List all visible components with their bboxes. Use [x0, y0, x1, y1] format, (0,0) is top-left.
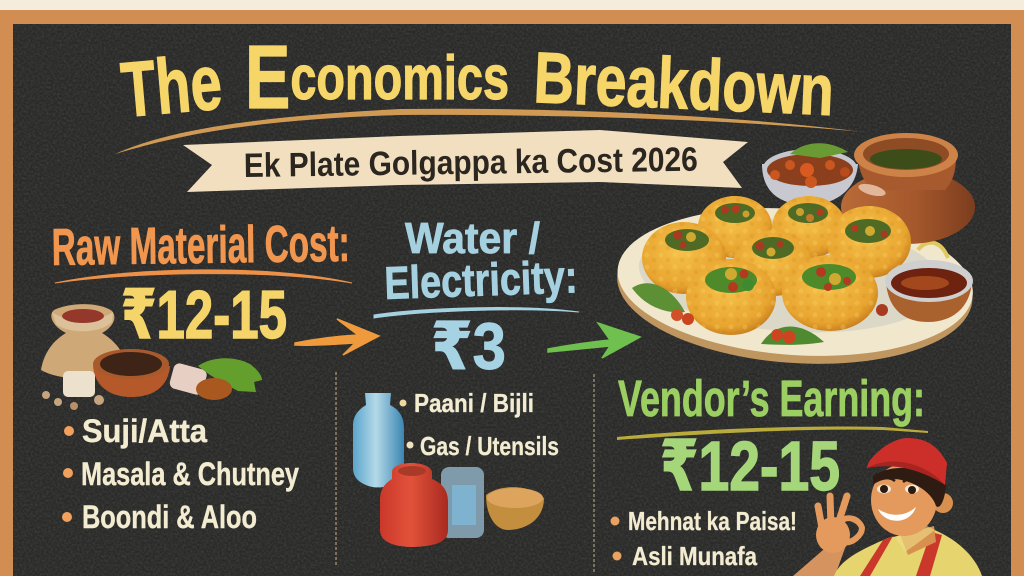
- list: vendor benefits: [610, 506, 797, 571]
- amount: ₹12-15: [660, 427, 840, 505]
- subtitle banner: Ek Plate Golgappa ka Cost 2026: [244, 141, 698, 185]
- title: The: [118, 38, 225, 134]
- underline: [617, 426, 928, 440]
- list: raw materials: Suji/Atta: [82, 413, 207, 449]
- arrow: orange: [295, 319, 379, 355]
- list: vendor benefits: Asli Munafa: [632, 541, 757, 571]
- icon: cylinders and bowl: [353, 393, 544, 547]
- title: conomics: [290, 44, 509, 113]
- clay pot: [841, 133, 975, 244]
- list: raw materials: Masala & Chutney: [81, 456, 299, 492]
- garnish leaves and tomatoes: [632, 283, 888, 345]
- plate handle: [918, 243, 948, 258]
- heading: raw material cost: Raw Material Cost:: [51, 215, 350, 277]
- heading: water / electricity: Water /: [405, 214, 540, 263]
- heading: water / electricity: [384, 214, 578, 309]
- title: E: [245, 28, 305, 128]
- list: raw materials: Boondi & Aloo: [82, 499, 257, 535]
- list: vendor benefits: Mehnat ka Paisa!: [628, 506, 797, 536]
- list: utilities: Paani / Bijli: [414, 388, 534, 418]
- title underline swoosh: [115, 109, 862, 154]
- subtitle banner: [183, 130, 748, 192]
- panel: raw material cost: [41, 215, 352, 535]
- heading: water / electricity: Electricity:: [384, 250, 578, 309]
- list: raw materials: [62, 413, 299, 535]
- plate: [612, 197, 978, 375]
- panel: vendor's earning: [610, 370, 982, 576]
- list: utilities: Gas / Utensils: [420, 431, 559, 461]
- chickpea bowl: [762, 143, 858, 205]
- list: utilities: [400, 388, 559, 461]
- divider: [593, 374, 595, 572]
- underline: [374, 308, 579, 318]
- title: [118, 28, 836, 134]
- divider: [335, 372, 337, 566]
- title: Breakdown: [532, 38, 836, 131]
- icon: ingredients: [41, 304, 262, 410]
- golgappa puris: [642, 196, 911, 335]
- underline: [55, 270, 352, 283]
- panel: water and electricity: [353, 214, 579, 547]
- amount: ₹3: [431, 309, 506, 383]
- amount: ₹12-15: [121, 277, 287, 353]
- illustration: smiling vendor: [793, 438, 982, 576]
- arrow: green: [548, 323, 640, 358]
- chutney bowl: [885, 260, 973, 322]
- illustration: golgappa plate: [612, 133, 978, 375]
